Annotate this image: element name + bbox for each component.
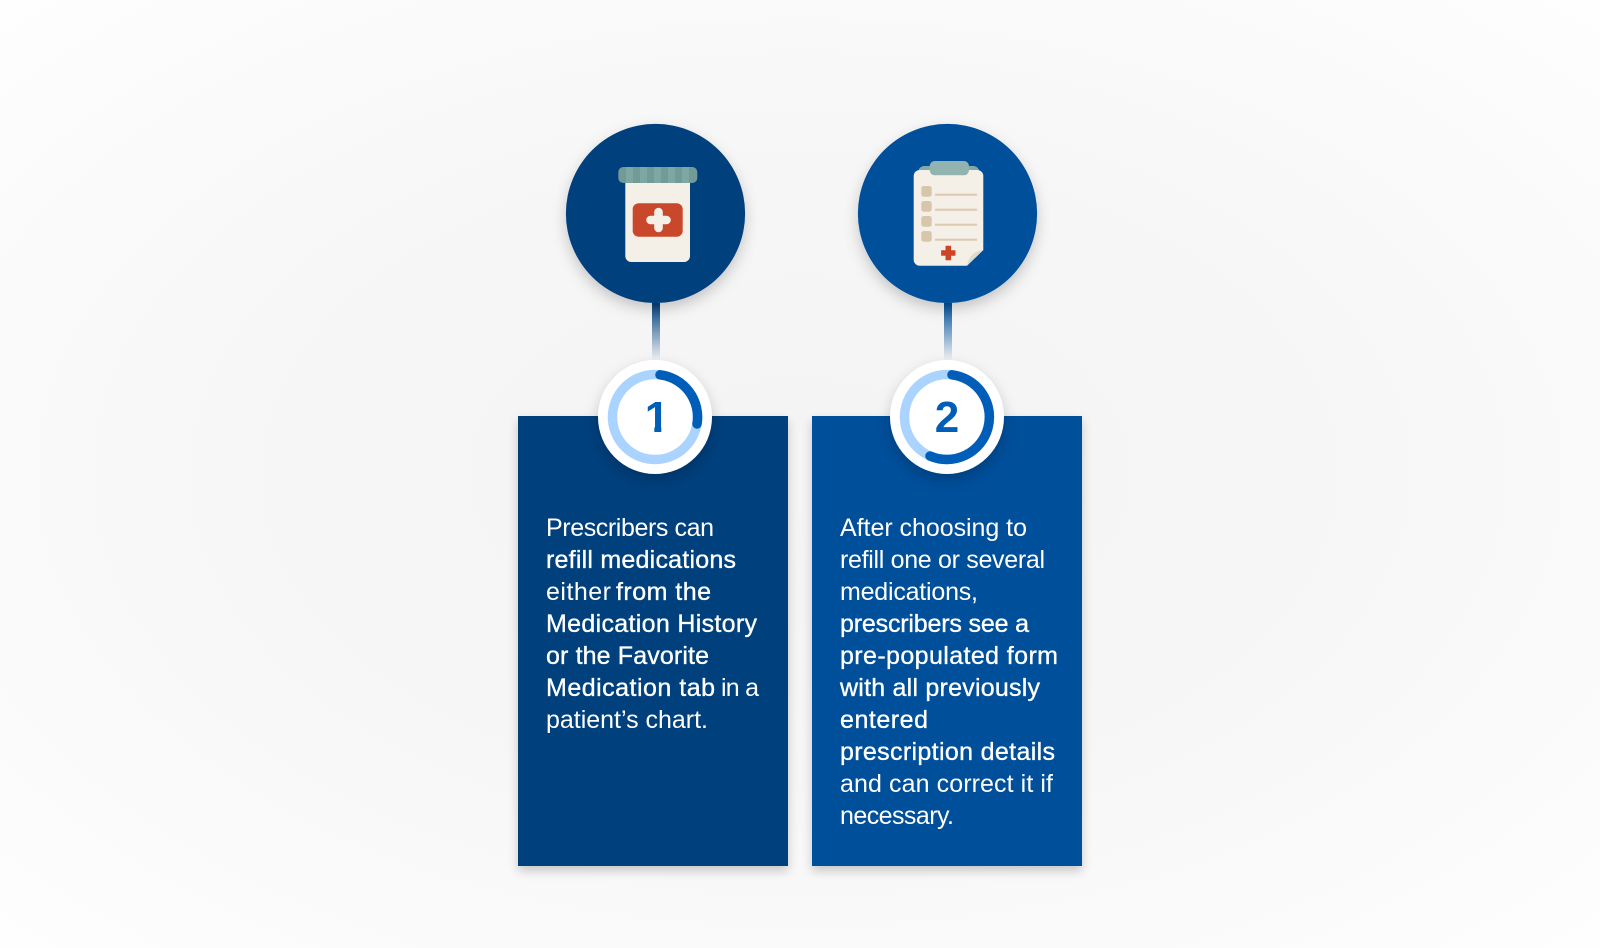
connector 2 — [944, 303, 952, 361]
number badge 1 — [598, 360, 712, 474]
panel: step 2 — [812, 124, 1082, 866]
step number 2: 2 — [935, 393, 959, 442]
text block 1: Medication History — [546, 610, 758, 638]
text block 2: prescription details — [840, 738, 1055, 766]
text block 2: prescribers see a — [840, 610, 1029, 638]
text block 2: necessary. — [840, 802, 954, 830]
text block 1: patient’s chart. — [546, 706, 708, 734]
number badge 2 — [890, 360, 1004, 474]
text block 2: medications, — [840, 578, 978, 606]
connector 1 — [652, 303, 660, 361]
text block 2: pre-populated form — [840, 642, 1058, 670]
text block 1: either — [546, 578, 611, 606]
icon: medicine bottle — [618, 167, 697, 262]
text block 1: or the Favorite — [546, 642, 709, 670]
text block 1: from the — [616, 578, 711, 606]
text block 2: entered — [840, 706, 928, 734]
text block 1: in a — [721, 674, 759, 702]
panel 2 box — [812, 416, 1082, 866]
text block 1: Medication tab — [546, 674, 715, 702]
icon circle 2 — [858, 124, 1037, 303]
text block 2: with all previously — [839, 674, 1040, 702]
text block 2 — [839, 514, 1058, 830]
panel 1 box — [518, 416, 788, 866]
text block 1 — [546, 514, 759, 734]
text block 2: After choosing to — [840, 514, 1027, 542]
icon: clipboard — [914, 161, 983, 266]
step number 1: 1 — [645, 393, 669, 442]
text block 1: refill medications — [546, 546, 736, 574]
text block 2: and can correct it if — [840, 770, 1053, 798]
panel: step 1 — [518, 124, 788, 866]
text block 2: refill one or several — [840, 546, 1045, 574]
text block 1: Prescribers can — [546, 514, 714, 542]
icon circle 1 — [566, 124, 745, 303]
